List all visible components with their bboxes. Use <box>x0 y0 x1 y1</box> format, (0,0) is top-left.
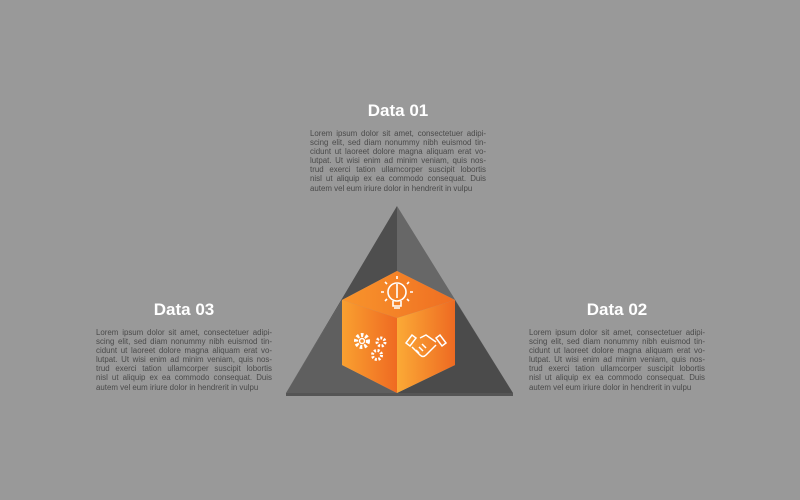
text block: Data 01 <box>310 129 486 193</box>
text block: Data 03: cidunt ut laoreet dolore magna aliquam erat vo- <box>96 346 272 355</box>
title: Data 03: Data 03 <box>154 300 214 319</box>
text block: Data 01: scing elit, sed diam nonummy nibh euismod tin- <box>310 138 486 147</box>
text block: Data 01: lutpat. Ut wisi enim ad minim veniam, quis nos- <box>310 156 486 165</box>
text block: Data 01: cidunt ut laoreet dolore magna aliquam erat vo- <box>310 147 486 156</box>
icon: gears <box>356 335 385 360</box>
text block: Data 02: lutpat. Ut wisi enim ad minim veniam, quis nos- <box>529 355 705 364</box>
text block: Data 03: Lorem ipsum dolor sit amet, consectetuer adipi- <box>96 328 272 337</box>
text block: Data 03: nisl ut aliquip ex ea commodo consequat. Duis <box>96 373 272 382</box>
icon: lightbulb <box>381 276 413 308</box>
text block: Data 03: lutpat. Ut wisi enim ad minim veniam, quis nos- <box>96 355 272 364</box>
text block: Data 02: cidunt ut laoreet dolore magna aliquam erat vo- <box>529 346 705 355</box>
icon: handshake <box>406 335 446 356</box>
title: Data 02: Data 02 <box>587 300 647 319</box>
text block: Data 03: autem vel eum iriure dolor in hendrerit in vulpu <box>96 383 258 392</box>
text block: Data 03 <box>96 328 272 392</box>
text block: Data 01: autem vel eum iriure dolor in hendrerit in vulpu <box>310 184 472 193</box>
text block: Data 02: nisl ut aliquip ex ea commodo consequat. Duis <box>529 373 705 382</box>
text block: Data 02: scing elit, sed diam nonummy nibh euismod tin- <box>529 337 705 346</box>
cube <box>342 271 455 393</box>
title: Data 01: Data 01 <box>368 101 428 120</box>
text block: Data 03: trud exerci tation ullamcorper suscipit lobortis <box>96 364 272 373</box>
text block: Data 03: scing elit, sed diam nonummy nibh euismod tin- <box>96 337 272 346</box>
text block: Data 01: nisl ut aliquip ex ea commodo consequat. Duis <box>310 174 486 183</box>
text block: Data 01: Lorem ipsum dolor sit amet, consectetuer adipi- <box>310 129 486 138</box>
text block: Data 02: trud exerci tation ullamcorper suscipit lobortis <box>529 364 705 373</box>
text block: Data 02: autem vel eum iriure dolor in hendrerit in vulpu <box>529 383 691 392</box>
text block: Data 02: Lorem ipsum dolor sit amet, consectetuer adipi- <box>529 328 705 337</box>
text block: Data 01: trud exerci tation ullamcorper suscipit lobortis <box>310 165 486 174</box>
text block: Data 02 <box>529 328 705 392</box>
